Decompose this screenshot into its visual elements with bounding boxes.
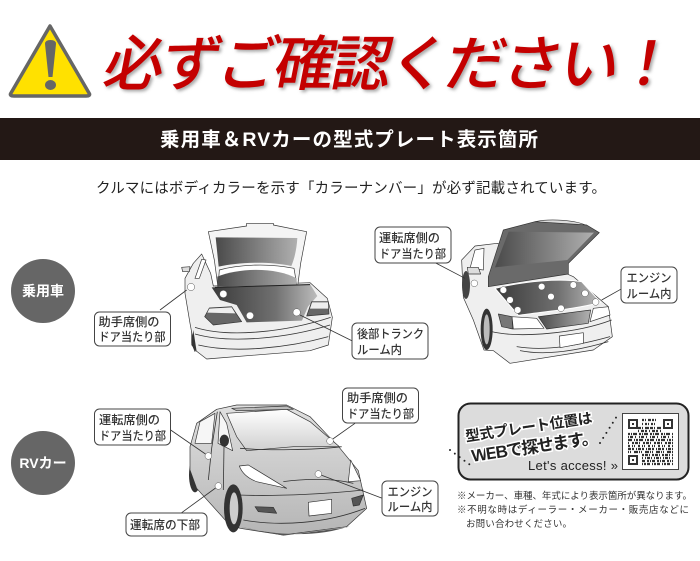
QR code (622, 414, 678, 470)
label: エンジンルーム内 (sedan) (621, 267, 677, 303)
label: エンジンルーム内 (sedan): ルーム内 (626, 286, 672, 301)
badge: RVカー: RVカー (19, 455, 67, 471)
title: 必ずご確認ください！ (98, 31, 684, 98)
label: 運転席側のドア当たり部 (RV): 運転席側の (99, 412, 160, 427)
label: 助手席側のドア当たり部 (sedan): 助手席側の (98, 314, 160, 329)
label: 後部トランクルーム内: 後部トランク (357, 326, 424, 341)
dotted accent lines (450, 416, 617, 467)
heading band (0, 118, 700, 160)
footnotes: ※メーカー、車種、年式により表示箇所が異なります。 (457, 490, 692, 502)
intro text: クルマにはボディカラーを示す「カラーナンバー」が必ず記載されています。 (96, 179, 606, 197)
icon: warning triangle (10, 26, 90, 96)
badge: 乗用車 (11, 259, 75, 323)
label: 助手席側のドア当たり部 (sedan): ドア当たり部 (98, 329, 166, 344)
label: エンジンルーム内 (RV): ルーム内 (388, 499, 432, 514)
label: 運転席側のドア当たり部 (RV) (94, 409, 170, 445)
callout heading text: 型式プレート位置は (464, 410, 594, 445)
illustration: sedan rear with open trunk (160, 223, 352, 359)
illustration: RV minivan front (171, 405, 382, 536)
label: 運転席側のドア当たり部 (sedan): 運転席側の (379, 230, 440, 245)
callout heading text (464, 409, 600, 466)
label: エンジンルーム内 (RV) (382, 481, 438, 516)
label: 運転席側のドア当たり部 (sedan): ドア当たり部 (379, 246, 446, 261)
illustration: sedan front with open hood (435, 220, 621, 363)
label: 運転席側のドア当たり部 (sedan) (375, 227, 451, 263)
label: エンジンルーム内 (RV): エンジン (388, 485, 432, 499)
label: 運転席の下部: 運転席の下部 (130, 517, 200, 532)
label: 助手席側のドア当たり部 (RV) (342, 388, 418, 423)
badge: RVカー (11, 431, 75, 495)
footnotes: お問い合わせください。 (466, 518, 572, 530)
footnotes (457, 490, 692, 530)
label: 助手席側のドア当たり部 (sedan) (94, 312, 170, 346)
panel: web QR callout (450, 404, 688, 480)
label: 助手席側のドア当たり部 (RV): 助手席側の (347, 390, 408, 405)
label: 運転席の下部 (126, 513, 207, 536)
badge: 乗用車: 乗用車 (22, 283, 64, 299)
label: 助手席側のドア当たり部 (RV): ドア当たり部 (347, 406, 414, 421)
label: 後部トランクルーム内 (352, 323, 428, 359)
callout heading text: WEBで探せます。 (470, 428, 600, 466)
heading band: 乗用車＆RVカーの型式プレート表示箇所 (160, 128, 538, 151)
label: エンジンルーム内 (sedan): エンジン (626, 271, 672, 285)
label: 後部トランクルーム内: ルーム内 (357, 342, 402, 357)
label: 運転席側のドア当たり部 (RV): ドア当たり部 (99, 428, 166, 443)
let's access text: Let's access! » (528, 458, 618, 473)
footnotes: ※不明な時はディーラー・メーカー・販売店などに (457, 504, 689, 516)
